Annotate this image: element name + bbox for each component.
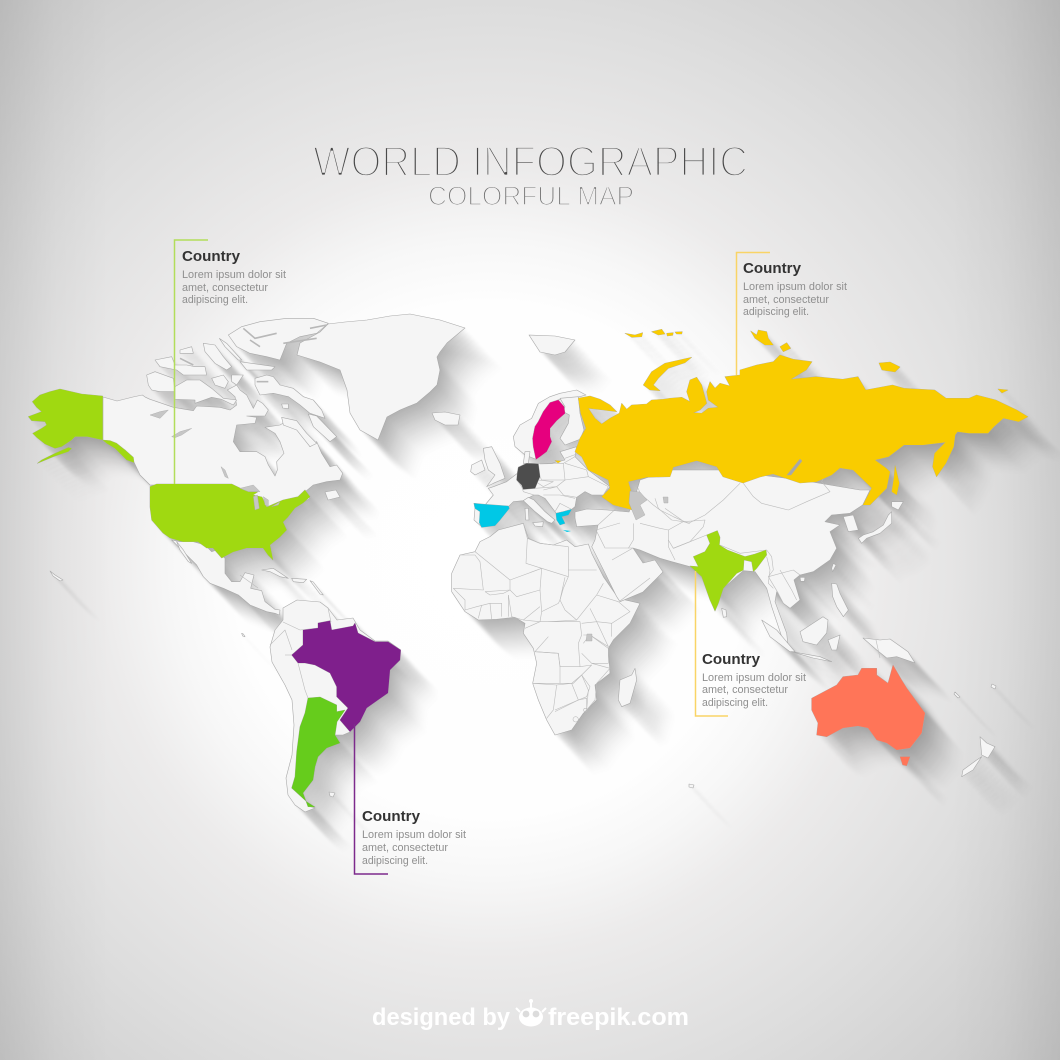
callout: Brazil: adipiscing elit.: [362, 855, 428, 867]
callout: India: Country: [702, 652, 760, 668]
fjords and arctic channels: [180, 325, 327, 382]
callout: Russia: [736, 252, 847, 375]
lakes and inland seas: [150, 410, 802, 641]
callout: Brazil: Country: [362, 809, 420, 825]
callout: North America: Lorem ipsum dolor sit: [182, 269, 286, 281]
subtitle: COLORFUL MAP: [428, 181, 634, 211]
callout: Brazil: [354, 724, 466, 874]
callout: Russia: Country: [743, 261, 801, 277]
callout: North America: adipiscing elit.: [182, 294, 248, 306]
highlighted country: Greece: [556, 509, 572, 532]
callout: India: [696, 571, 806, 716]
footer credit: freepik.com: [548, 1004, 689, 1031]
world map base: [28, 314, 1028, 812]
callout: North America: [174, 240, 286, 484]
icon: freepik mascot: [516, 999, 546, 1026]
highlighted country: Australia: [812, 665, 925, 766]
long drop shadows of the landmasses: [30, 316, 1060, 852]
callout: Russia: amet, consectetur: [743, 294, 829, 306]
footer credit: [372, 999, 689, 1031]
footer credit: designed by: [372, 1004, 511, 1031]
callout: Brazil: Lorem ipsum dolor sit: [362, 829, 466, 841]
highlighted country: Sweden: [533, 400, 565, 459]
callout: India: Lorem ipsum dolor sit: [702, 672, 806, 684]
highlighted country: United States: [150, 484, 310, 560]
callout: Brazil: amet, consectetur: [362, 842, 448, 854]
callout: Russia: adipiscing elit.: [743, 306, 809, 318]
highlighted country: Argentina: [292, 697, 345, 807]
callout: North America: amet, consectetur: [182, 282, 268, 294]
highlighted country: Brazil: [292, 621, 401, 732]
title: WORLD INFOGRAPHIC: [313, 138, 748, 186]
highlighted country: Germany: [517, 463, 540, 489]
country border lines: [240, 450, 880, 722]
highlighted country: Alaska: [28, 389, 134, 463]
highlighted country: India: [690, 531, 767, 611]
callout: North America: Country: [182, 249, 240, 265]
callout: Russia: Lorem ipsum dolor sit: [743, 281, 847, 293]
callout: India: adipiscing elit.: [702, 697, 768, 709]
highlighted country: Spain: [474, 503, 509, 527]
callout: India: amet, consectetur: [702, 684, 788, 696]
highlighted country: Russia: [555, 329, 1028, 510]
